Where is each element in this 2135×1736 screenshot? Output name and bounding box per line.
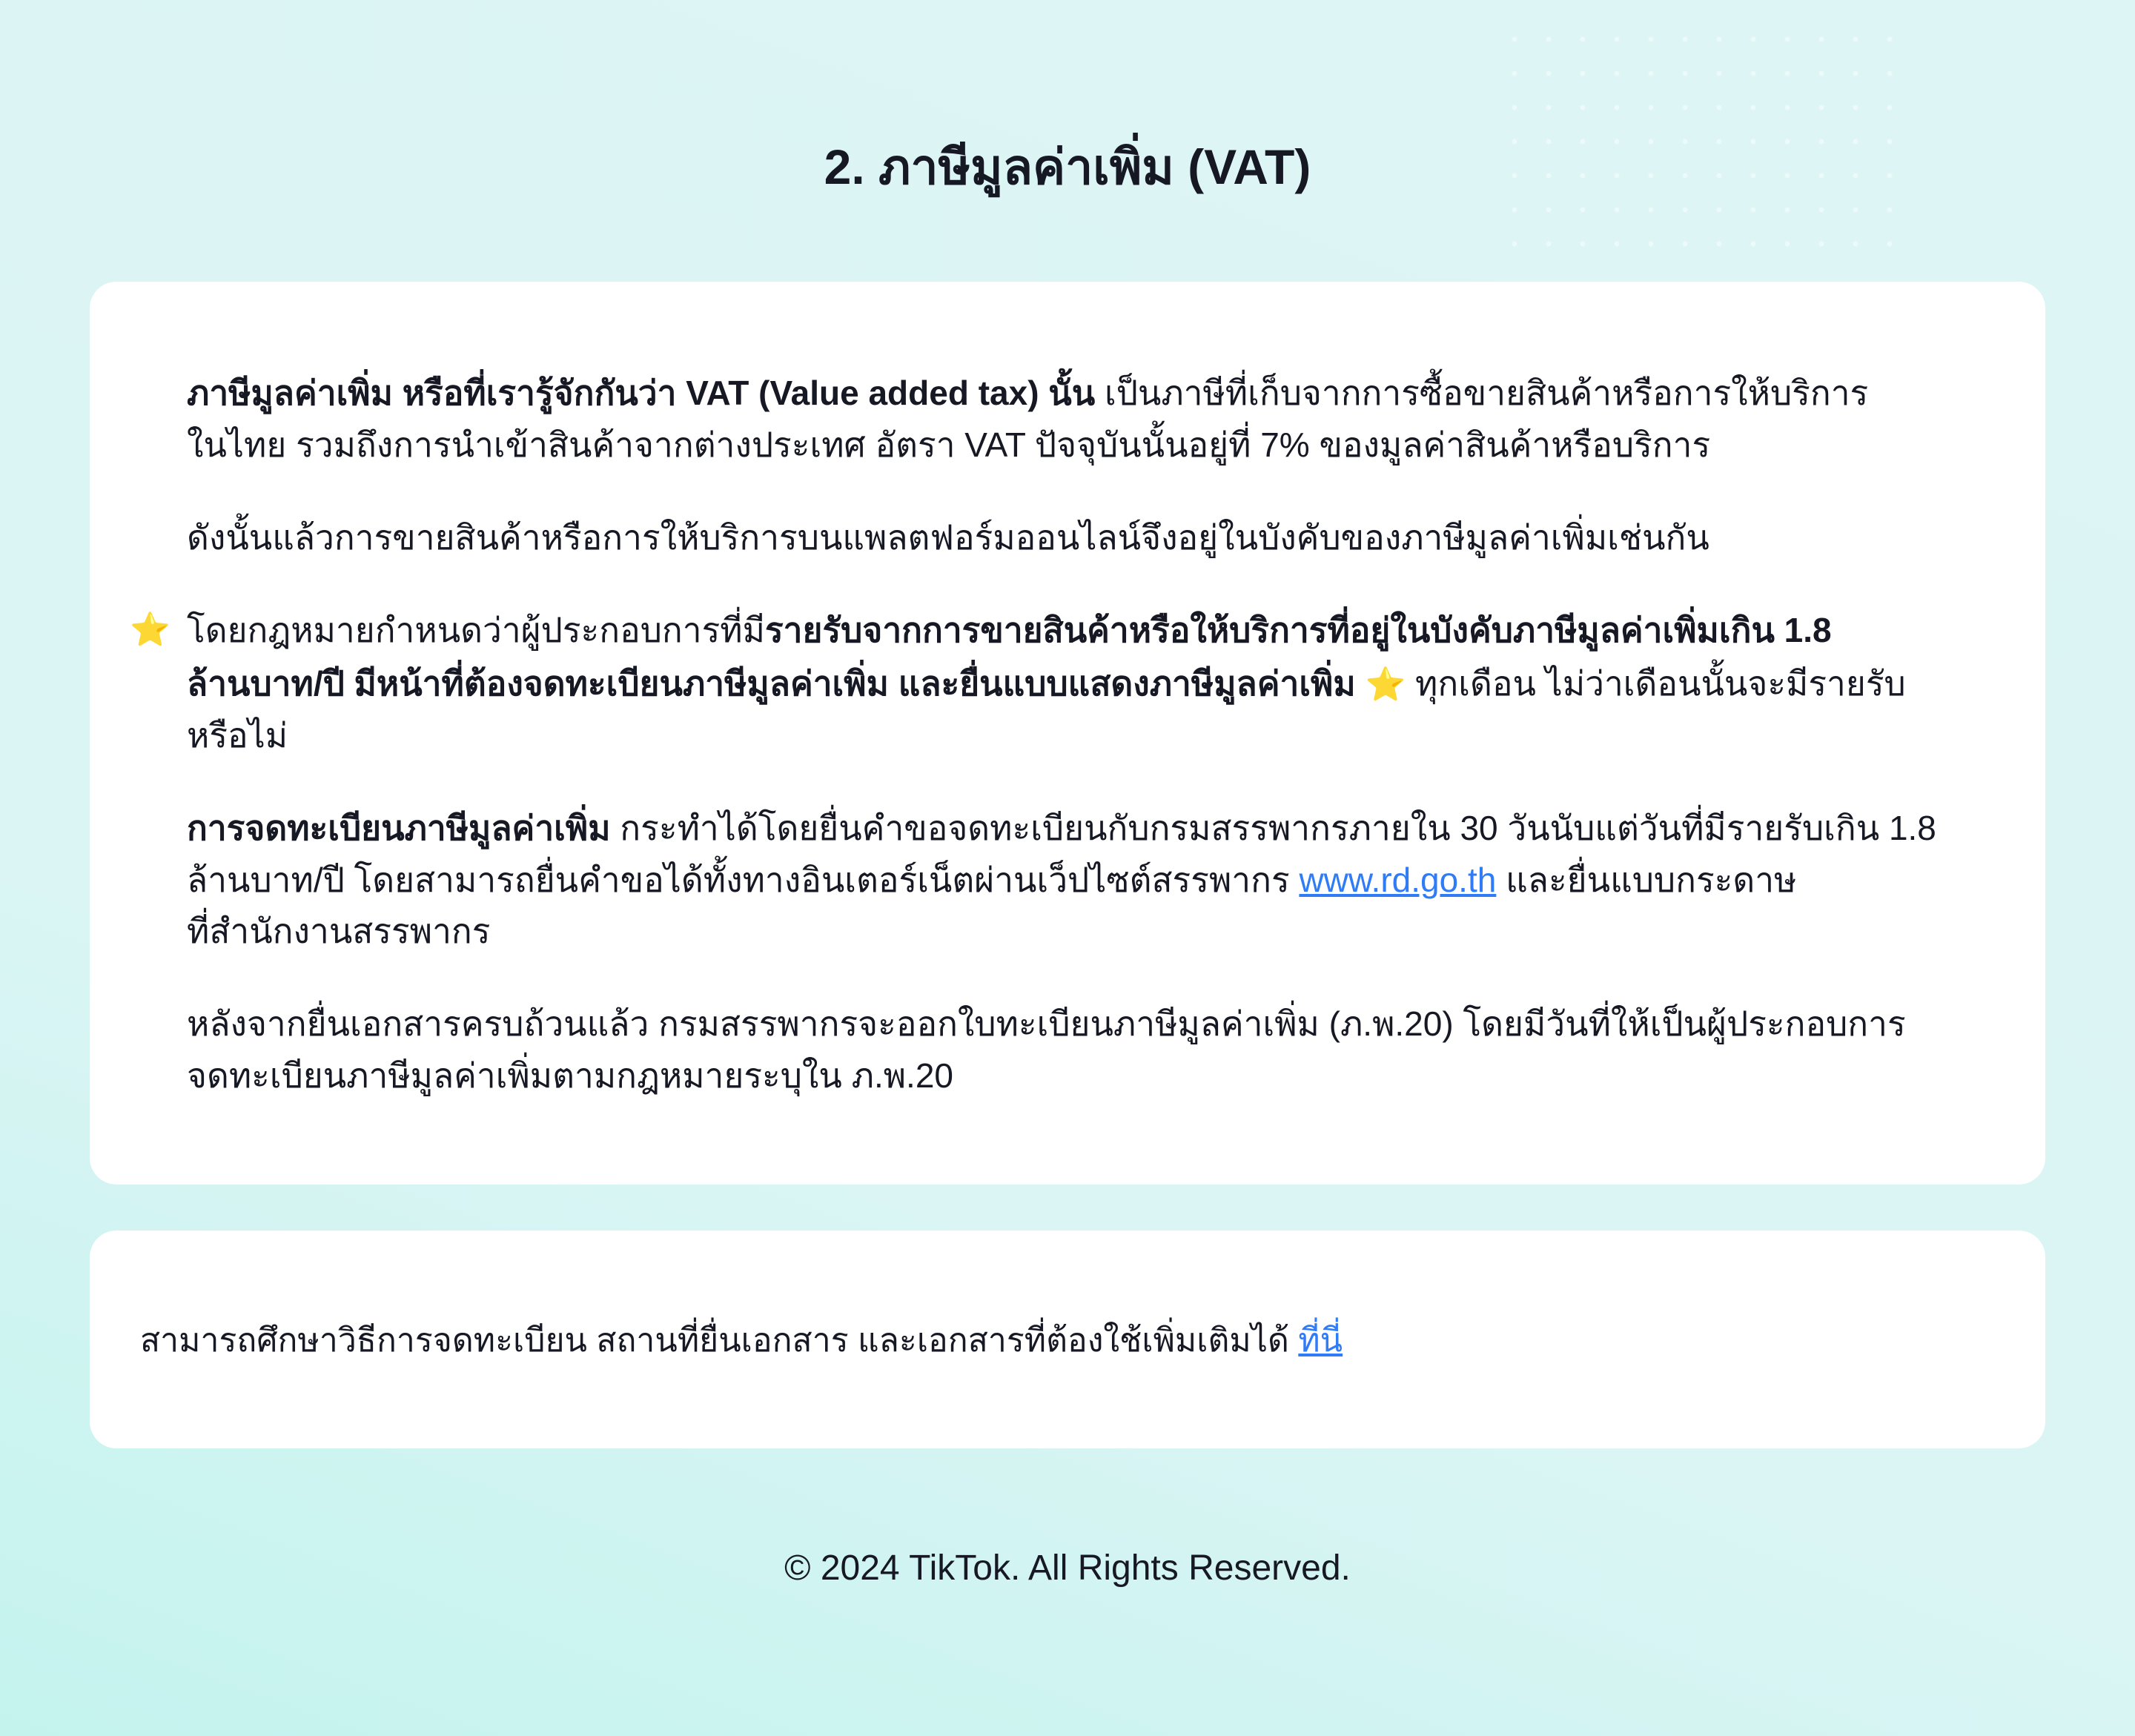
- text block: VAT definition: ภาษีมูลค่าเพิ่ม หรือที่เรารู้จักกันว่า VAT (Value added tax) นั้น เป็นภาษีที่เก็บจากการซื้อขายสินค้าหรือการให้บริการ: [187, 374, 1868, 412]
- text block: legal requirement: หรือไม่: [187, 716, 288, 755]
- text block: VAT definition: [187, 368, 1868, 466]
- text block: registration: การจดทะเบียนภาษีมูลค่าเพิ่ม กระทำได้โดยยื่นคำขอจดทะเบียนกับกรมสรรพากรภายใน 30 วันนับแต่วันที่มีรายรับเกิน 1.8: [187, 809, 1936, 847]
- text block: more info link: สามารถศึกษาวิธีการจดทะเบียน สถานที่ยื่นเอกสาร และเอกสารที่ต้องใช้เพิ่มเติมได้ ที่นี่: [140, 1322, 1343, 1359]
- title: 2. ภาษีมูลค่าเพิ่ม (VAT): [824, 139, 1311, 194]
- text block: registration: [187, 804, 1936, 950]
- text block: legal requirement: [187, 606, 1906, 755]
- panel: VAT explanation card: [90, 282, 2045, 1185]
- icon: star: ⭐: [130, 612, 171, 648]
- text block: registration: ล้านบาท/ปี โดยสามารถยื่นคำขอได้ทั้งทางอินเตอร์เน็ตผ่านเว็ปไซต์สรรพากร www.rd.go.th และยื่นแบบกระดาษ: [187, 861, 1796, 899]
- footer: © 2024 TikTok. All Rights Reserved.: [784, 1548, 1351, 1588]
- text block: legal requirement: โดยกฎหมายกำหนดว่าผู้ประกอบการที่มีรายรับจากการขายสินค้าหรือให้บริการที่อยู่ในบังคับภาษีมูลค่าเพิ่มเกิน 1.8: [187, 611, 1832, 649]
- text block: legal requirement: ล้านบาท/ปี มีหน้าที่ต้องจดทะเบียนภาษีมูลค่าเพิ่ม และยื่นแบบแสดงภาษีมูลค่าเพิ่ม ⭐ ทุกเดือน ไม่ว่าเดือนนั้นจะมีรายรับ: [187, 664, 1906, 703]
- panel: more info card: [90, 1230, 2045, 1448]
- text block: certificate: [187, 1001, 1906, 1097]
- text block: registration: ที่สำนักงานสรรพากร: [187, 912, 490, 950]
- text block: online platforms: ดังนั้นแล้วการขายสินค้าหรือการให้บริการบนแพลตฟอร์มออนไลน์จึงอยู่ในบังคับของภาษีมูลค่าเพิ่มเช่นกัน: [187, 518, 1709, 557]
- text block: certificate: จดทะเบียนภาษีมูลค่าเพิ่มตามกฎหมายระบุใน ภ.พ.20: [187, 1056, 953, 1095]
- text block: VAT definition: ในไทย รวมถึงการนำเข้าสินค้าจากต่างประเทศ อัตรา VAT ปัจจุบันนั้นอยู่ที่ 7% ของมูลค่าสินค้าหรือบริการ: [187, 425, 1710, 464]
- text block: certificate: หลังจากยื่นเอกสารครบถ้วนแล้ว กรมสรรพากรจะออกใบทะเบียนภาษีมูลค่าเพิ่ม (ภ.พ.20) โดยมีวันที่ให้เป็นผู้ประกอบการ: [187, 1004, 1906, 1043]
